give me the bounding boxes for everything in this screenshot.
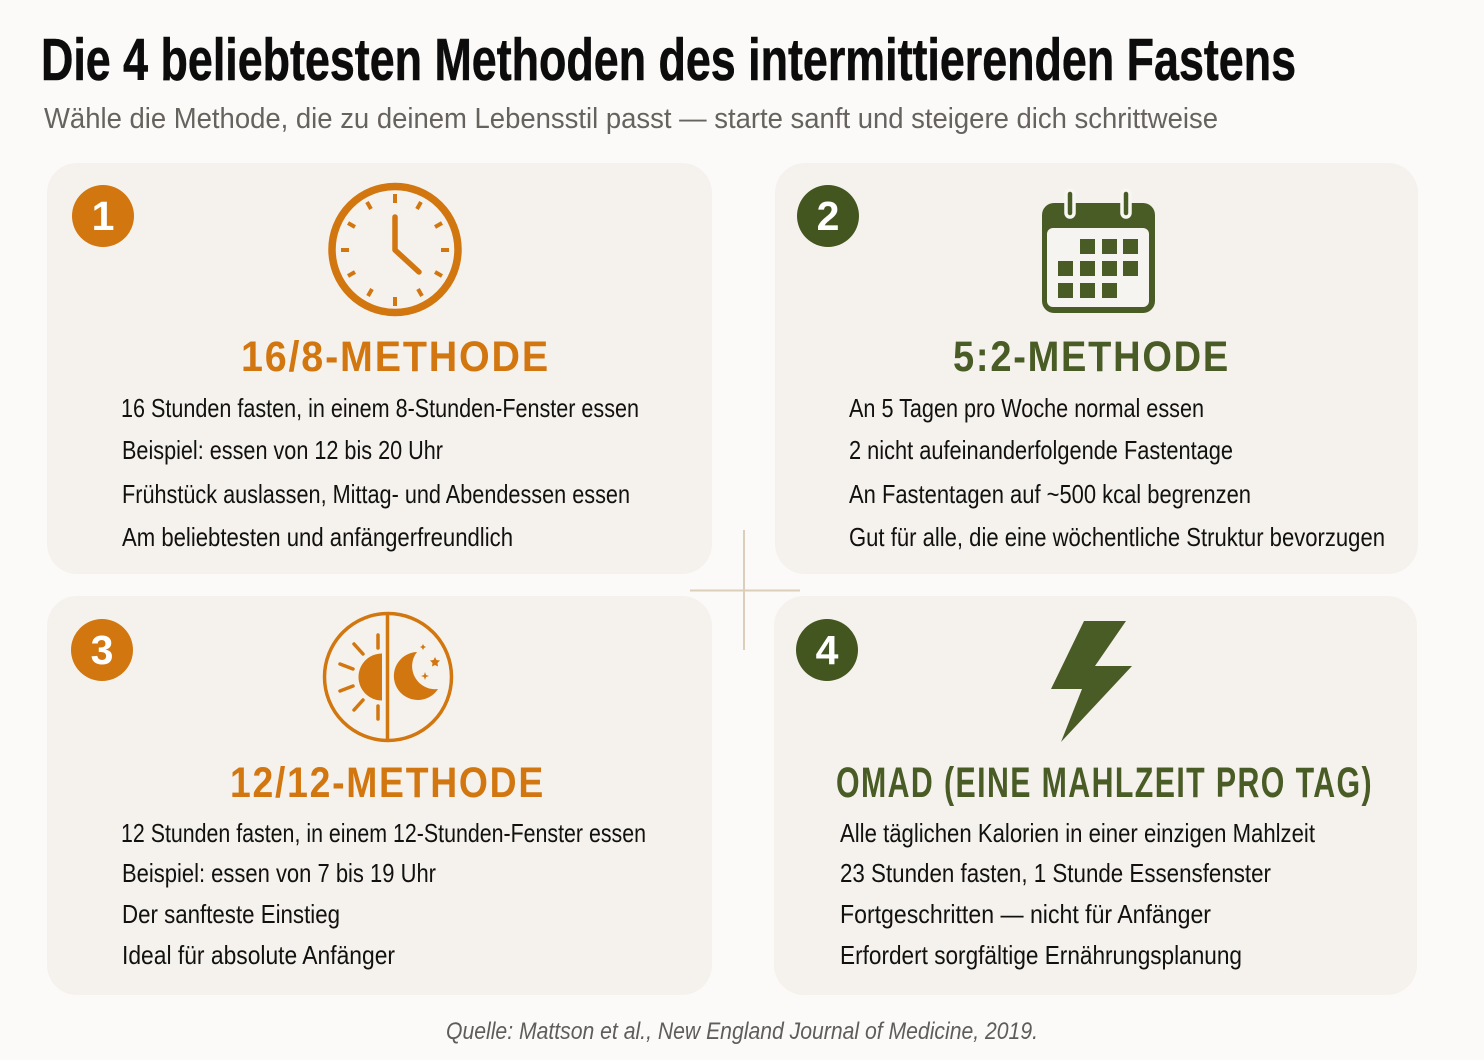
badge 4: 4 xyxy=(816,627,839,673)
text block: An Fastentagen auf ~500 kcal begrenzen xyxy=(849,479,1251,509)
text block: Alle täglichen Kalorien in einer einzigen Mahlzeit xyxy=(840,818,1316,848)
text block: Erfordert sorgfältige Ernährungsplanung xyxy=(840,940,1242,970)
text block xyxy=(121,393,639,552)
icon: sun and moon xyxy=(324,612,452,742)
text block: Frühstück auslassen, Mittag- und Abendessen essen xyxy=(122,479,630,509)
subtitle: Wähle die Methode, die zu deinem Lebensstil passt — starte sanft und steigere dich schrittweise xyxy=(44,103,1218,135)
text block: 2 nicht aufeinanderfolgende Fastentage xyxy=(849,435,1233,465)
icon: lightning bolt xyxy=(1051,621,1132,742)
heading: 5:2-METHODE xyxy=(953,333,1230,381)
text block: Ideal für absolute Anfänger xyxy=(122,940,395,970)
panel: 12/12 method xyxy=(47,596,712,995)
icon: clock xyxy=(332,186,458,312)
panel: 5:2 method xyxy=(775,163,1418,574)
text block: 12 Stunden fasten, in einem 12-Stunden-Fenster essen xyxy=(121,818,646,848)
icon: calendar xyxy=(1042,190,1155,313)
badge 3 xyxy=(71,619,133,681)
text block xyxy=(840,818,1316,970)
heading: 16/8-METHODE xyxy=(241,333,550,381)
text block: Beispiel: essen von 12 bis 20 Uhr xyxy=(122,435,443,465)
text block xyxy=(849,393,1385,552)
text block: An 5 Tagen pro Woche normal essen xyxy=(849,393,1204,423)
heading: 12/12-METHODE xyxy=(230,759,545,807)
text block: 23 Stunden fasten, 1 Stunde Essensfenster xyxy=(840,858,1271,888)
text block: Beispiel: essen von 7 bis 19 Uhr xyxy=(122,858,436,888)
text block xyxy=(121,818,646,970)
badge 4 xyxy=(796,619,858,681)
text block: 16 Stunden fasten, in einem 8-Stunden-Fenster essen xyxy=(121,393,639,423)
badge 3: 3 xyxy=(91,627,113,673)
text block: Am beliebtesten und anfängerfreundlich xyxy=(122,522,513,552)
badge 2: 2 xyxy=(817,193,839,239)
text block: Fortgeschritten — nicht für Anfänger xyxy=(840,899,1211,929)
badge 1: 1 xyxy=(92,193,114,239)
text block: Gut für alle, die eine wöchentliche Struktur bevorzugen xyxy=(849,522,1385,552)
source note: Quelle: Mattson et al., New England Journal of Medicine, 2019. xyxy=(446,1018,1038,1045)
badge 2 xyxy=(797,185,859,247)
panel: 16/8 method xyxy=(47,163,712,574)
text block: Der sanfteste Einstieg xyxy=(122,899,340,929)
panel: OMAD method xyxy=(774,596,1417,995)
badge 1 xyxy=(72,185,134,247)
